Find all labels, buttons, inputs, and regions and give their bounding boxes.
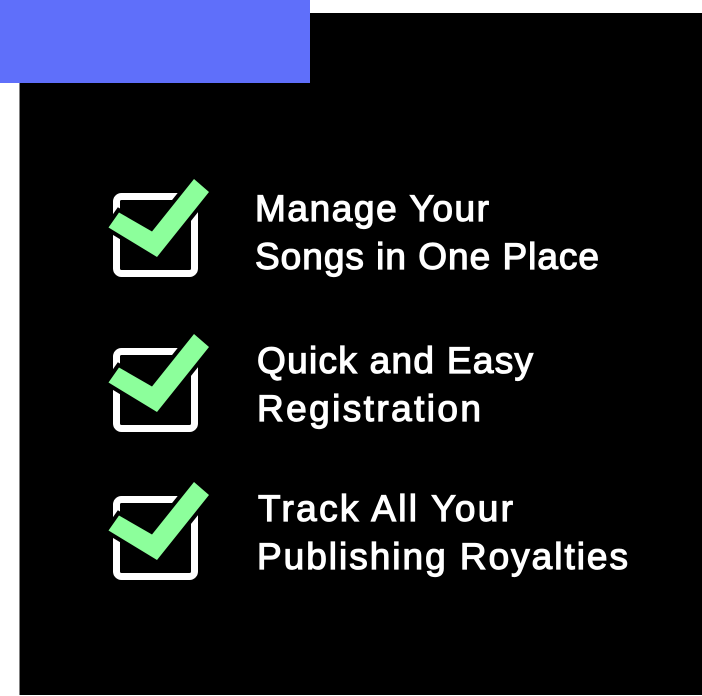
text: manage your songs in one place: Manage Your xyxy=(255,188,489,229)
text: track all your publishing royalties xyxy=(257,488,628,577)
icon: checkbox 3 xyxy=(108,482,209,576)
item 1: manage songs xyxy=(108,179,599,277)
text: quick and easy registration: Registration xyxy=(257,388,481,429)
icon: checkbox 2 xyxy=(108,334,209,428)
blue header block xyxy=(0,0,310,83)
text: quick and easy registration: Quick and Easy xyxy=(257,340,534,381)
text: manage your songs in one place xyxy=(255,188,599,277)
text: manage your songs in one place: Songs in One Place xyxy=(255,236,599,277)
text: quick and easy registration xyxy=(257,340,534,429)
item 2: quick registration xyxy=(108,334,534,429)
text: track all your publishing royalties: Publishing Royalties xyxy=(257,536,628,577)
icon: checkbox 1 xyxy=(108,179,209,274)
item 3: track royalties xyxy=(108,482,628,577)
text: track all your publishing royalties: Track All Your xyxy=(258,488,513,529)
